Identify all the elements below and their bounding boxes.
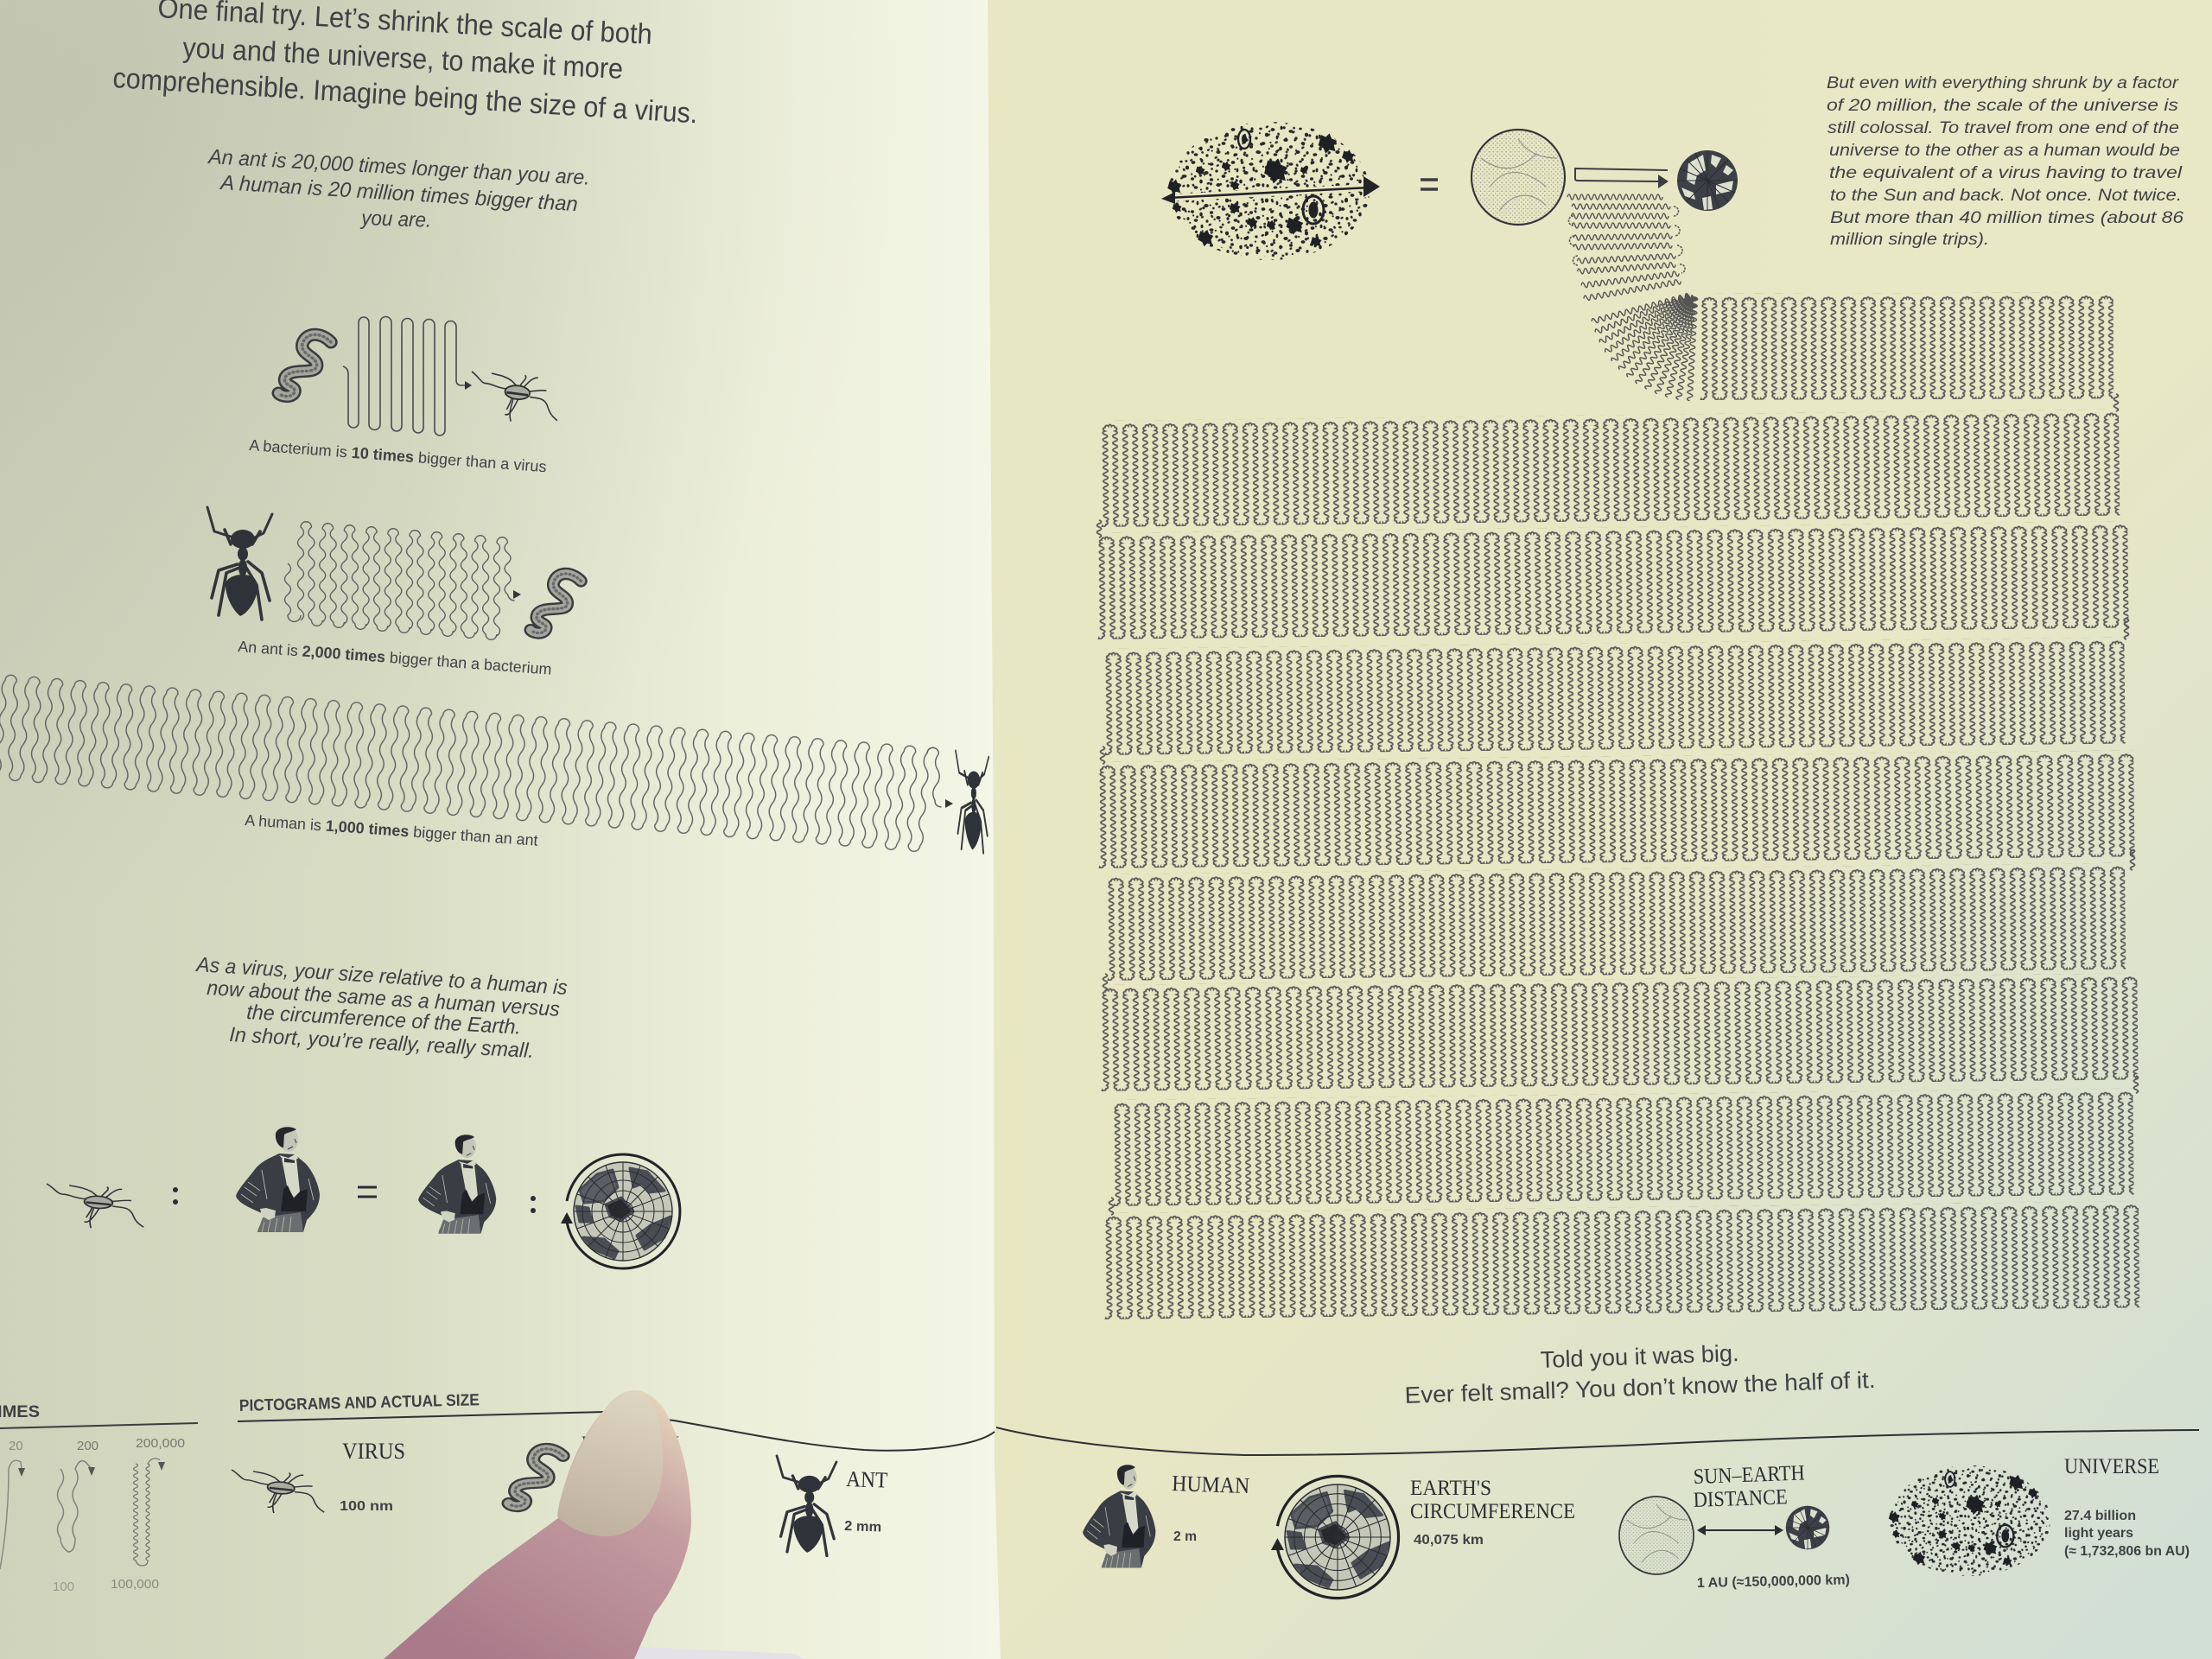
legend: universe: light years: [2064, 1526, 2133, 1541]
legend: Sun-Earth distance: SUN–EARTH: [1693, 1462, 1805, 1489]
italic text: virus vs human vs earth: the circumference of the Earth.: [246, 1001, 522, 1039]
legend: human: HUMAN: [1172, 1471, 1250, 1498]
legend: universe: 27.4 billion: [2064, 1509, 2136, 1523]
text block: still colossal: [1827, 74, 2184, 249]
legend: Earth's circumference: [1271, 1476, 1575, 1599]
italic text: virus vs human vs earth: As a virus, your size relative to a human is: [194, 953, 568, 1000]
mini scale diagram: [0, 1436, 185, 1594]
mini scale diagram: 200,000: [136, 1436, 185, 1451]
icon: bacterium, second row: [531, 574, 581, 633]
text block: still colossal: still colossal. To travel from one end of the: [1827, 119, 2179, 137]
left intro heading: you and the universe, to make it more: [182, 31, 624, 85]
icon: virus, top row: [472, 372, 557, 422]
icon: ant, third row: [956, 751, 988, 853]
mini scale diagram: 200: [77, 1439, 99, 1453]
closing text: [1404, 1340, 1876, 1408]
serpentine fan turning corner: [1567, 194, 1698, 401]
serpentine rows: [1096, 292, 2139, 1319]
legend: Earth's circumference: EARTH'S: [1410, 1477, 1491, 1500]
thumb holding the book: [384, 1390, 691, 1659]
left intro heading: [112, 0, 699, 129]
legend: virus: 100 nm: [340, 1499, 393, 1514]
universe diameter equation, top of right page: [1161, 122, 1738, 260]
wavy serpentine line: 2,000 times: [285, 522, 521, 639]
legend: Earth's circumference: 40,075 km: [1414, 1533, 1484, 1548]
text block: still colossal: million single trips).: [1830, 231, 1989, 249]
icon: human: [236, 1127, 320, 1232]
mini scale diagram: 100: [53, 1580, 74, 1594]
caption: 1,000 times: A human is 1,000 times bigger than an ant: [245, 811, 538, 849]
legend: ant: ANT: [846, 1466, 888, 1493]
legend: human: [1083, 1465, 1250, 1568]
text block: still colossal: But even with everything shrunk by a factor: [1827, 74, 2179, 92]
italic text: ant and human versus you: A human is 20 million times bigger than: [219, 171, 579, 216]
colon: [173, 1187, 178, 1205]
ratio equation: virus : human = human : Earth: [47, 1127, 680, 1268]
serpentine line: 10 times: [343, 316, 472, 435]
icon: virus: [47, 1184, 143, 1228]
closing text: Told you it was big.: [1540, 1340, 1739, 1373]
italic text: ant and human versus you: An ant is 20,000 times longer than you are.: [207, 145, 590, 190]
icon: Sun: [1471, 130, 1565, 225]
legend: universe: UNIVERSE: [2064, 1455, 2159, 1478]
arrow into ant: [945, 799, 953, 808]
huge serpentine wiggle line: 86 million trips: [1096, 194, 2139, 1319]
wavy serpentine line: 1,000 times: [0, 671, 946, 855]
caption: 2,000 times: An ant is 2,000 times bigger than a bacterium: [238, 638, 552, 678]
icon: ant, second row: [207, 507, 272, 620]
italic text: virus vs human vs earth: [194, 953, 568, 1063]
closing text: Ever felt small? You don’t know the half of it.: [1404, 1367, 1876, 1408]
equals sign: [358, 1187, 377, 1197]
text block: still colossal: the equivalent of a virus having to travel: [1829, 164, 2183, 182]
caption: 10 times: A bacterium is 10 times bigger than a virus: [249, 436, 547, 475]
legend: universe: [1889, 1455, 2190, 1576]
legend: Sun-Earth distance: [1619, 1462, 1850, 1591]
equals sign: [1421, 180, 1438, 189]
legend rule across both pages: [238, 1412, 2199, 1455]
page stack at bottom: [628, 1647, 804, 1659]
italic text: virus vs human vs earth: In short, you’re really, really small.: [229, 1023, 535, 1063]
legend: bacterium: BACTERIUM: [582, 1432, 679, 1457]
mini scale diagram: 20: [9, 1439, 23, 1453]
icon: Earth with circumference arrow: [561, 1154, 680, 1268]
legend header fragment and rule: times: [0, 1403, 198, 1428]
text block: still colossal: universe to the other as a human would be: [1829, 142, 2180, 160]
text block: still colossal: But more than 40 million times (about 86: [1830, 209, 2184, 227]
text block: still colossal: to the Sun and back. Not once. Not twice.: [1830, 187, 2182, 205]
legend: ant: [777, 1456, 888, 1555]
legend: Sun-Earth distance: 1 AU (≈150,000,000 km): [1697, 1573, 1850, 1591]
icon: universe with diameter arrow: [1161, 122, 1380, 260]
legend: Earth's circumference: CIRCUMFERENCE: [1410, 1500, 1575, 1523]
legend: virus: [232, 1439, 405, 1514]
italic text: virus vs human vs earth: now about the same as a human versus: [207, 976, 561, 1021]
icon: human: [418, 1135, 496, 1234]
icon: Earth: [1677, 150, 1738, 211]
legend: Sun-Earth distance: DISTANCE: [1693, 1485, 1788, 1512]
legend: universe: (≈ 1,732,806 bn AU): [2064, 1544, 2190, 1559]
icon: bacterium, top row: [278, 334, 331, 397]
italic text: ant and human versus you: [207, 145, 590, 232]
legend: human: 2 m: [1173, 1529, 1197, 1544]
out and back arrow: [1575, 168, 1669, 188]
legend: virus: VIRUS: [342, 1439, 405, 1464]
mini scale diagram: 100,000: [111, 1577, 159, 1592]
legend: ant: 2 mm: [844, 1519, 881, 1535]
text block: still colossal: of 20 million, the scale of the universe is: [1827, 97, 2179, 115]
italic text: ant and human versus you: you are.: [359, 207, 432, 232]
colon: [531, 1196, 536, 1213]
legend heading: pictograms and actual size: PICTOGRAMS AND ACTUAL SIZE: [239, 1391, 480, 1415]
legend: bacterium: [508, 1432, 679, 1506]
left intro heading: comprehensible. Imagine being the size of a virus.: [112, 61, 699, 129]
